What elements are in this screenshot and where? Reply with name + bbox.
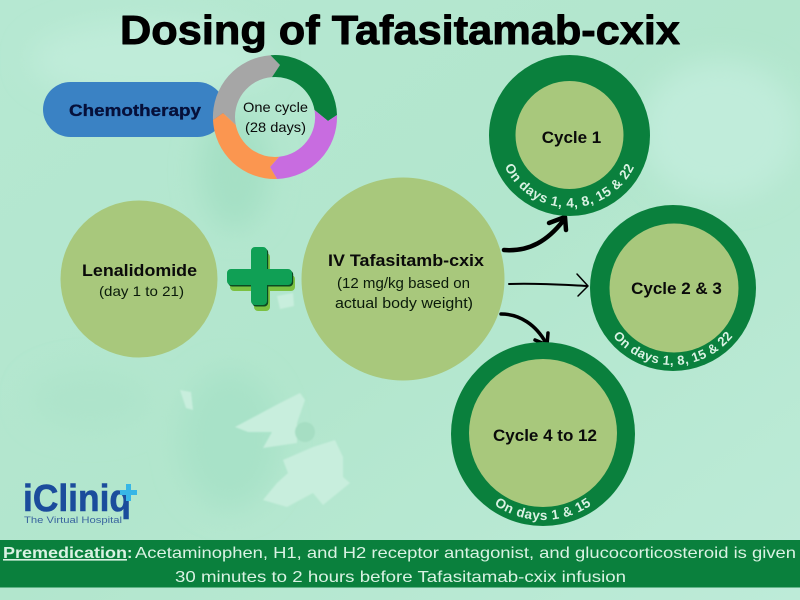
cycle label: One cycle <box>243 99 308 115</box>
plus icon <box>227 247 295 311</box>
arrow to cycle 4 to 12 <box>501 314 548 345</box>
cycle 4 to 12 badge: On days 1 & 15 <box>496 498 590 522</box>
lenalidomide circle <box>60 200 218 358</box>
title: Dosing of Tafasitamab-cxix <box>120 7 680 53</box>
cycle 2 and 3 badge <box>590 205 756 371</box>
arrow to cycle 1 <box>504 217 566 250</box>
cycle 1 badge: On days 1, 4, 8, 15 & 22 <box>506 164 634 210</box>
cycle 2 and 3 badge: Cycle 2 & 3 <box>631 279 722 298</box>
lenalidomide circle: Lenalidomide <box>82 262 197 280</box>
iv tafasitamab circle: actual body weight) <box>335 296 473 312</box>
cycle 2 and 3 badge: On days 1, 8, 15 & 22 <box>614 332 732 367</box>
cycle 1 badge <box>489 55 650 216</box>
iv tafasitamab circle <box>302 178 504 380</box>
iv tafasitamab circle: (12 mg/kg based on <box>337 276 470 292</box>
segment: orange <box>213 113 279 179</box>
premedication band: Premedication <box>3 545 127 562</box>
chemotherapy pill <box>43 82 225 137</box>
lenalidomide circle: (day 1 to 21) <box>99 283 184 299</box>
icliniq logo: The Virtual Hospital <box>24 515 122 525</box>
premedication band: : <box>127 545 132 562</box>
segment: green <box>270 55 337 121</box>
one cycle donut <box>213 55 337 179</box>
cycle 4 to 12 badge <box>451 342 635 526</box>
iv tafasitamab circle: IV Tafasitamb-cxix <box>328 252 485 270</box>
cycle 1 badge: Cycle 1 <box>542 128 601 147</box>
premedication band: Acetaminophen, H1, and H2 receptor antagonist, and glucocorticosteroid is given <box>135 545 796 562</box>
icliniq logo: iCliniq <box>23 478 131 520</box>
premedication band: 30 minutes to 2 hours before Tafasitamab-cxix infusion <box>175 569 626 586</box>
cycle label <box>243 99 308 135</box>
segment: grey <box>213 55 280 125</box>
cycle 4 to 12 badge: Cycle 4 to 12 <box>493 426 597 445</box>
cycle label: (28 days) <box>245 119 306 135</box>
premedication band <box>0 540 800 588</box>
segment: purple <box>270 110 337 179</box>
arrow to cycle 2 and 3 <box>509 274 588 296</box>
chemotherapy pill: Chemotherapy <box>69 102 202 120</box>
